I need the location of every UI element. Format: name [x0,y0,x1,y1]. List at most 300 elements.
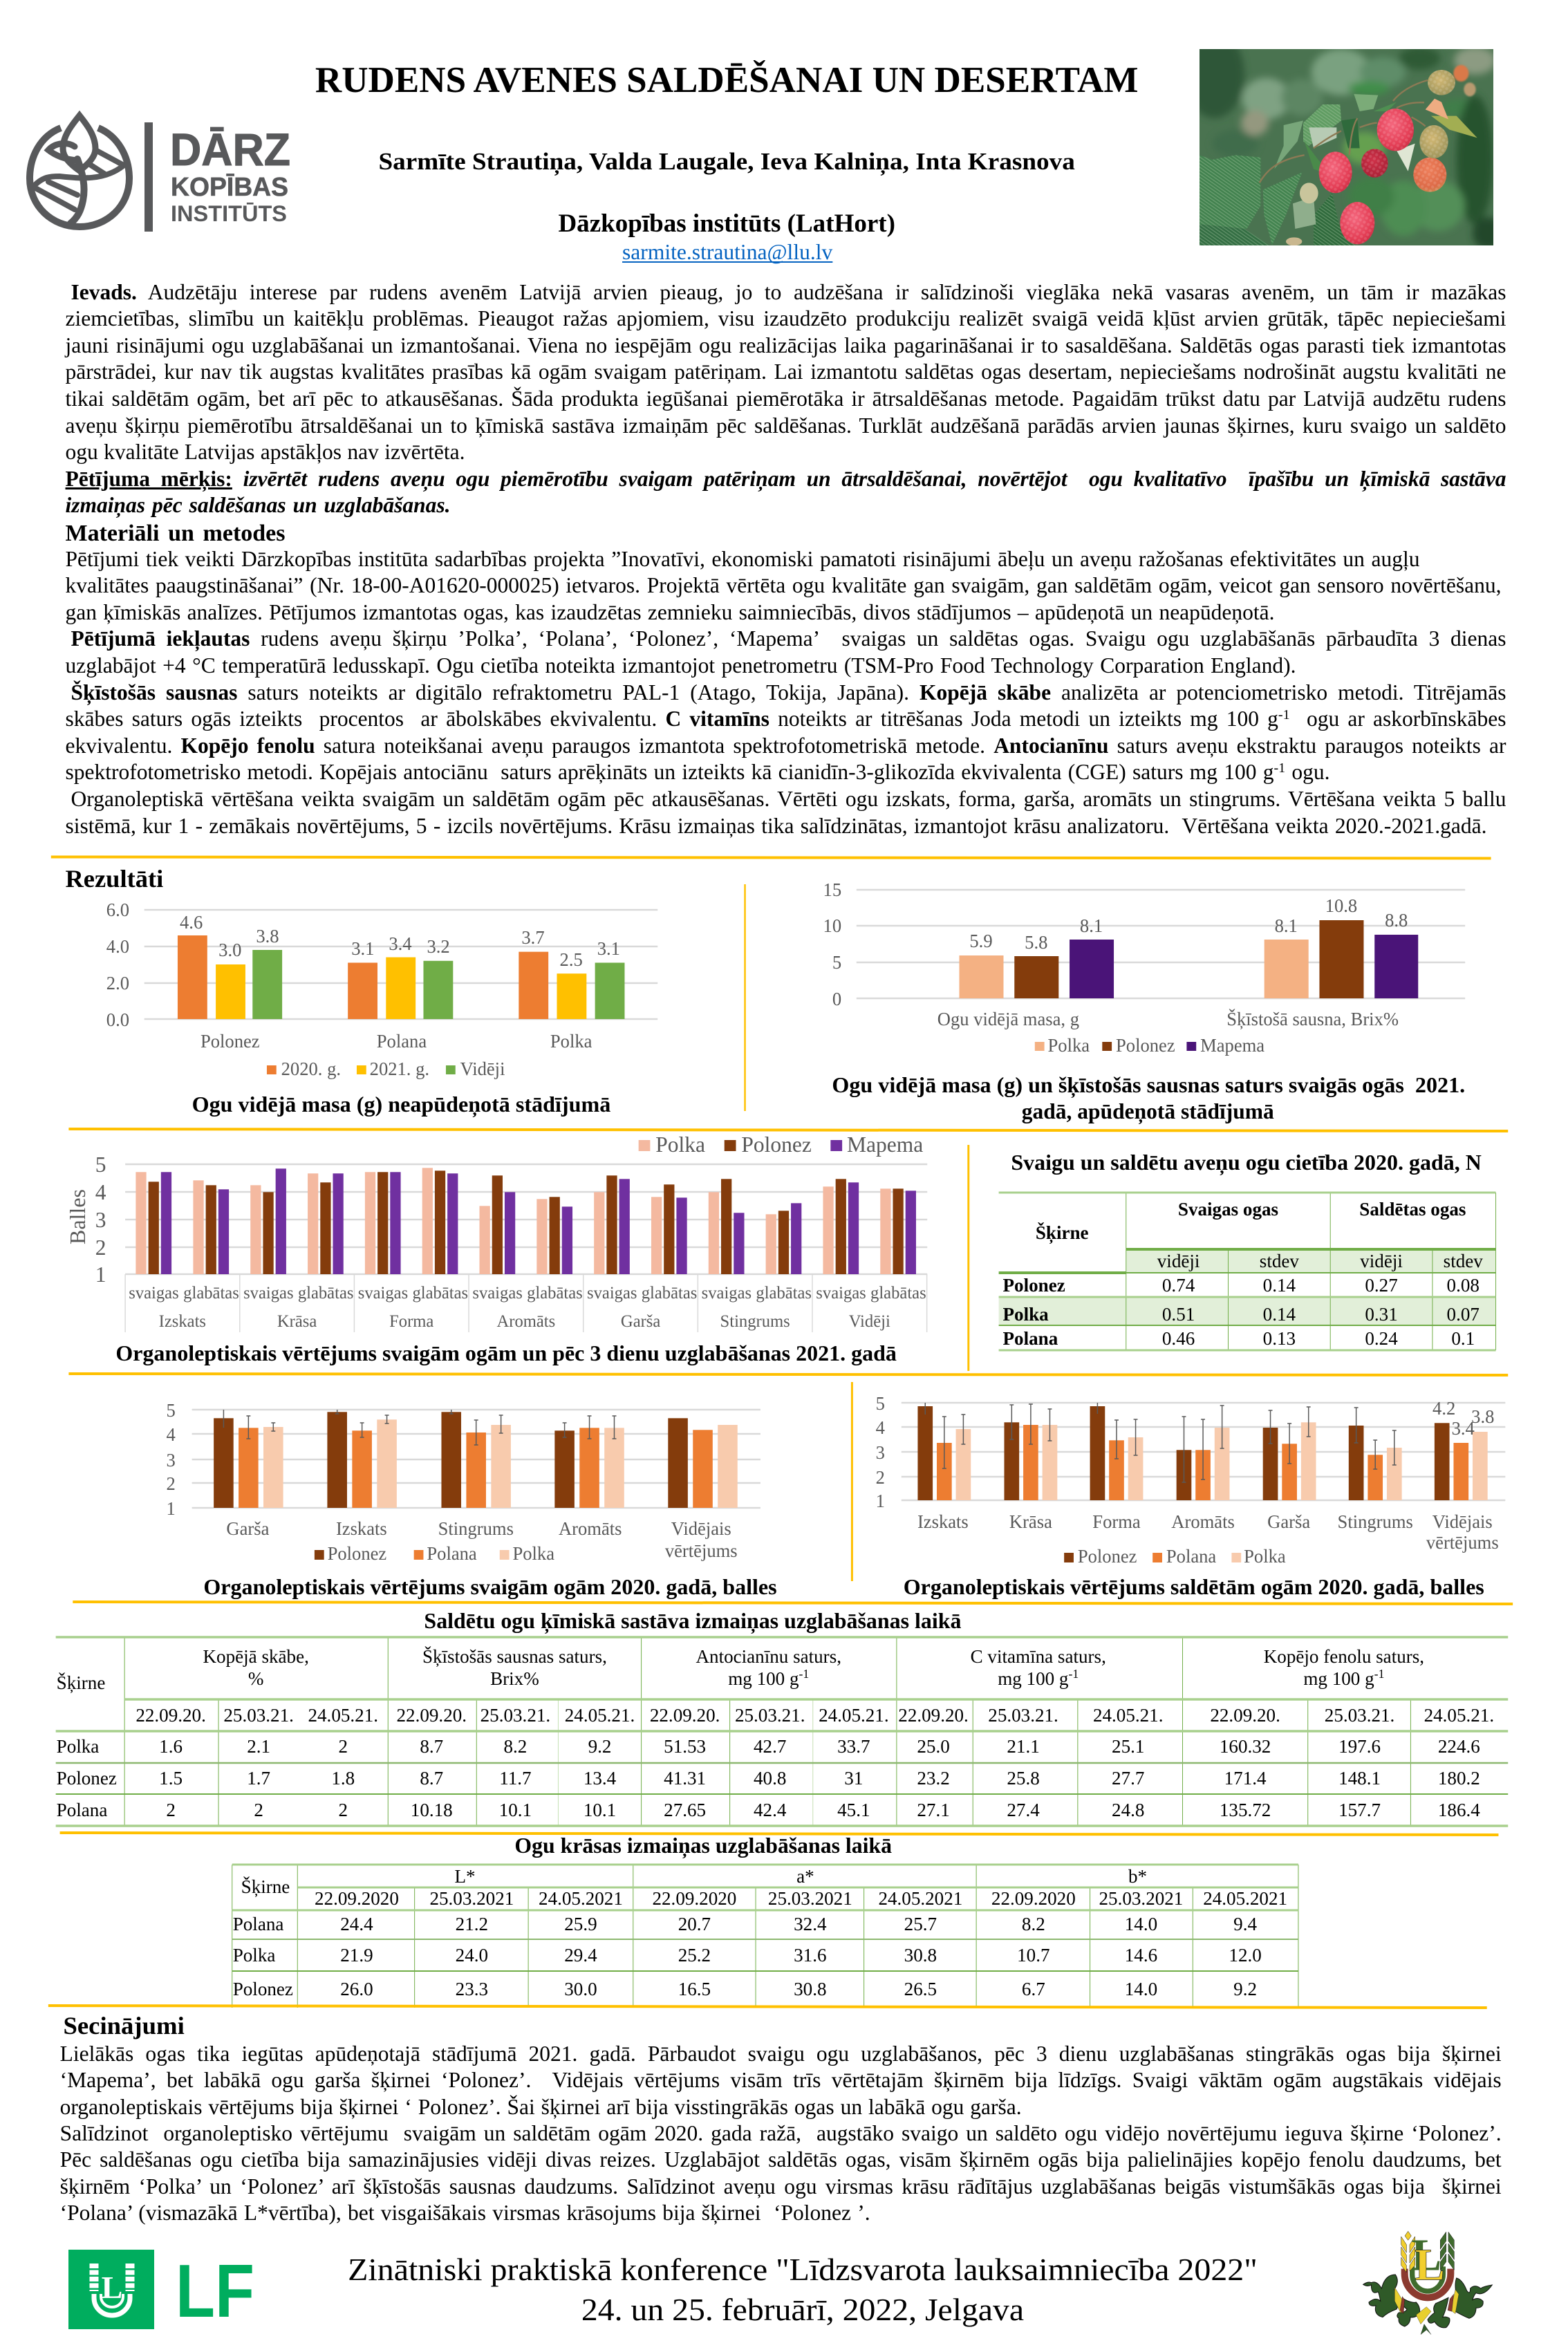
text block: introduction, aim and methods: ogu kvalitāte Latvijas apstākļos nav izvērtēta. [65,440,465,464]
text block: introduction, aim and methods: sistēmā, kur 1 - zemākais novērtējums, 5 - izcils novērtējums. Krāsu izmaiņas tika salīdzinātas, izmantojot krāsu analizatoru. Vērtēšana veikta 2020.-2021.gadā. [65,814,1486,838]
text block: introduction, aim and methods: Materiāli un metodes [65,521,285,546]
table: chemical composition during storage: 41.31 [664,1768,706,1789]
chart caption: fresh 2020: Organoleptiskais vērtējums svaigām ogām 2020. gadā, balles [203,1575,777,1599]
table: colour changes during storage: 30.0 [564,1979,597,1999]
bar chart: sensory evaluation fresh and after storage 2021: 5 [95,1152,106,1177]
table: colour changes during storage: 14.0 [1125,1914,1157,1934]
table: berry firmness: 0.27 [1365,1275,1398,1296]
table: berry firmness: 0.07 [1447,1304,1480,1325]
table: chemical composition during storage: 27.65 [664,1800,706,1820]
table: chemical composition during storage: 42.7 [754,1736,786,1757]
table: chemical composition during storage: -1 [799,1667,809,1681]
bar chart: sensory evaluation fresh and after storage 2021: glabātas [527,1284,583,1303]
bar chart: sensory frozen 2020: Aromāts [1171,1511,1235,1532]
bar chart: sensory fresh 2020 [166,1400,760,1564]
bar chart: sensory frozen 2020: Polana [1166,1546,1216,1567]
table: chemical composition during storage: 186.4 [1438,1800,1480,1820]
table: berry firmness: 0.13 [1263,1328,1296,1349]
table: berry firmness: 0.24 [1365,1328,1398,1349]
bar chart: berry mass, non-irrigated: 4.6 [180,912,203,933]
bar chart: berry mass and soluble solids, irrigated: Mapema [1200,1035,1264,1056]
bar chart: sensory evaluation fresh and after storage 2021: svaigas [587,1284,637,1303]
table: chemical composition during storage: 25.03.21. [988,1705,1058,1726]
logo: LLU crest: L [1415,2240,1445,2290]
table: chemical composition during storage: 22.09.20. [1210,1705,1280,1726]
bar chart: sensory evaluation fresh and after storage 2021: Krāsa [277,1312,317,1331]
table: chemical composition during storage: Brix% [490,1668,539,1689]
table: chemical composition during storage: 45.1 [837,1800,870,1820]
chart caption: irrigated [832,1073,1465,1125]
table: colour changes during storage: a* [796,1866,814,1887]
table: berry firmness: Polana [1003,1328,1058,1349]
bar chart: sensory frozen 2020: Polka [1244,1546,1286,1567]
table: berry firmness: Svaigas ogas [1178,1199,1278,1220]
bar chart: berry mass and soluble solids, irrigated: Polonez [1116,1035,1175,1056]
table: berry firmness: vidēji [1157,1251,1200,1271]
bar chart: berry mass and soluble solids, irrigated: 5 [832,952,841,973]
table: chemical composition during storage: 11.7 [499,1768,532,1789]
bar chart: sensory evaluation fresh and after storage 2021: Aromāts [496,1312,555,1331]
bar chart: berry mass, non-irrigated: 2.5 [560,949,583,970]
oak wreath [1363,2275,1492,2328]
table: chemical composition during storage: 1.5 [159,1768,183,1789]
bar chart: sensory evaluation fresh and after storage 2021: Garša [621,1312,660,1331]
bar chart: sensory frozen 2020: 4 [876,1417,885,1438]
bar chart: berry mass and soluble solids, irrigated: 0 [832,989,841,1009]
gold divider below first chart row [68,1128,1508,1132]
gold divider below methods [51,856,1491,860]
bar chart: berry mass, non-irrigated: 3.1 [597,938,620,959]
bar chart: sensory fresh 2020: Garša [226,1518,269,1539]
table: colour changes during storage: 9.2 [1233,1979,1257,1999]
bar chart: sensory fresh 2020: Polana [427,1543,477,1564]
table: colour changes during storage: 30.8 [904,1945,937,1966]
table: chemical composition during storage: 23.2 [917,1768,950,1789]
logo: Dārzkopības institūts: KOPĪBAS [171,173,288,202]
table: chemical composition during storage: 24.05.21. [819,1705,889,1726]
table: chemical composition during storage: 27.1 [917,1800,950,1820]
text block: introduction, aim and methods: spektrofotometrisko metodi. Kopējais antociānu saturs aprēķināts un izteikts kā cianidīn-3-glikozīda ekvivalenta (CGE) saturs mg 100 g-1 ogu. [65,760,1330,784]
table: chemical composition during storage: 22.09.20. [650,1705,720,1726]
photo: ripening raspberries on the cane [1200,49,1493,245]
bar chart: sensory frozen 2020: Polonez [1078,1546,1137,1567]
bar chart: sensory frozen 2020: Krāsa [1009,1511,1052,1532]
conference footer: 24. un 25. februārī, 2022, Jelgava [581,2292,1024,2327]
table: colour changes during storage [232,1865,1298,2008]
table: colour changes during storage: 31.6 [794,1945,827,1966]
bar chart: berry mass and soluble solids, irrigated: 8.8 [1385,910,1408,931]
table: berry firmness: 0.14 [1263,1304,1296,1325]
bar chart: berry mass, non-irrigated: 3.4 [389,933,412,954]
table: chemical composition during storage: 25.03.21. [223,1705,294,1726]
logo: LF green square [68,2249,254,2333]
conference footer [348,2252,1258,2327]
text block: introduction, aim and methods [65,280,1506,838]
table: colour changes during storage: 10.7 [1017,1945,1050,1966]
table: colour changes during storage: 26.0 [340,1979,373,1999]
text block: introduction, aim and methods: Pētījumā iekļautas rudens aveņu šķirņu ’Polka’, ‘Polana’, ‘Polonez’, ‘Mapema’ svaigas un saldētas ogas. Svaigu ogu uzglabāšanās pārbaudīta 3 dienas [71,626,1506,651]
table: colour changes during storage: 14.0 [1125,1979,1157,1999]
table: colour changes during storage: 21.9 [340,1945,373,1966]
text block: introduction, aim and methods: Pētījuma mērķis: izvērtēt rudens aveņu ogu piemērotību svaigam patēriņam un ātrsaldēšanai, novērtējot ogu kvalitatīvo īpašību un ķīmiskā sastāva [65,467,1506,491]
table: berry firmness: stdev [1260,1251,1299,1271]
table: colour changes during storage: 29.4 [564,1945,597,1966]
bar chart: sensory evaluation fresh and after storage 2021: svaigas [816,1284,866,1303]
table: chemical composition during storage: 27.4 [1007,1800,1040,1820]
table: chemical composition during storage: Polka [57,1736,99,1757]
bar chart: sensory fresh 2020: 4 [166,1424,176,1445]
bar chart: sensory fresh 2020: Polka [512,1543,554,1564]
bar chart: sensory fresh 2020: Izskats [336,1518,387,1539]
table: berry firmness: vidēji [1360,1251,1403,1271]
table: chemical composition during storage: 31 [844,1768,863,1789]
heading: Rezultāti: Rezultāti [65,865,163,893]
bar chart: berry mass and soluble solids, irrigated [823,879,1465,1056]
text block: introduction, aim and methods: gan ķīmiskās analīzes. Pētījumos izmantotas ogas, kas izaudzētas zemnieku saimniecībās, divos stādījumos – apūdeņotā un neapūdeņotā. [65,600,1275,624]
bar chart: berry mass, non-irrigated: 2.0 [106,973,129,993]
arcs [1405,2269,1450,2297]
table: colour changes during storage: 25.03.2021 [768,1888,852,1909]
table: chemical composition during storage [56,1637,1508,1826]
table: berry firmness: Šķirne [1036,1222,1089,1244]
text block: conclusions: organoleptiskais vērtējums bija šķirnei ‘ Polonez’. Šai šķirnei arī bija visstingrākās ogas un labākā ogu garša. [60,2095,1022,2119]
bar chart: berry mass and soluble solids, irrigated: 8.1 [1275,915,1298,936]
bar chart: berry mass, non-irrigated: 3.1 [351,938,374,959]
bar chart: berry mass, non-irrigated: Polka [550,1031,592,1052]
bar chart: berry mass and soluble solids, irrigated: Polka [1048,1035,1090,1056]
bar chart: berry mass and soluble solids, irrigated: 10 [823,915,841,936]
table: chemical composition during storage: 24.05.21. [1424,1705,1494,1726]
table: colour changes during storage: 24.0 [456,1945,488,1966]
bar chart: sensory frozen 2020: Forma [1092,1511,1141,1532]
table: chemical composition during storage: -1 [1068,1667,1079,1681]
logo: Dārzkopības institūts [30,115,290,232]
text block: conclusions: Pēc saldēšanas ogu cietība bija samazinājusies vidēji divas reizes. Uzglabājot saldētās ogas, visām šķirnēm ogās bija palielinājies kopējo fenolu daudzums, bet [60,2147,1502,2172]
table: chemical composition during storage: 22.09.20. [136,1705,206,1726]
bar chart: sensory frozen 2020: Garša [1267,1511,1310,1532]
table: colour changes during storage: Polana [233,1914,283,1934]
bar chart: sensory frozen 2020: 1 [876,1491,885,1511]
table: chemical composition during storage: 1.8 [331,1768,355,1789]
bar chart: berry mass and soluble solids, irrigated: 5.9 [969,931,993,951]
bar chart: sensory fresh 2020: 2 [166,1473,176,1494]
conference footer: Zinātniski praktiskā konference "Līdzsvarota lauksaimniecība 2022" [348,2252,1258,2287]
table: chemical composition during storage: 24.05.21. [1093,1705,1163,1726]
table: berry firmness: Saldētas ogas [1359,1199,1466,1220]
bar chart: sensory evaluation fresh and after storage 2021: Izskats [159,1312,206,1331]
table: chemical composition during storage: 2 [338,1800,348,1820]
table: chemical composition during storage: 22.09.20. [898,1705,969,1726]
bar chart: berry mass and soluble solids, irrigated: 10.8 [1325,895,1357,916]
chart caption: frozen 2020: Organoleptiskais vērtējums saldētām ogām 2020. gadā, balles [904,1575,1484,1599]
text block: introduction, aim and methods: aveņu šķirņu piemērotību ātrsaldēšanai un to ķīmiskā sastāva izmaiņām pēc saldēšanas. Turklāt audzēšanā parādās arvien jaunas šķirnes, kuru svaigo un saldēto [65,413,1506,438]
table heading: colour: Ogu krāsas izmaiņas uzglabāšanas laikā [514,1833,892,1859]
table: colour changes during storage: 24.4 [340,1914,373,1934]
table: chemical composition during storage: 157.7 [1338,1800,1381,1820]
bar chart: sensory evaluation fresh and after storage 2021: svaigas [358,1284,408,1303]
institute: Dāzkopības institūts (LatHort) [558,209,895,237]
table: chemical composition during storage: 25.03.21. [480,1705,550,1726]
gold divider below chemistry table [60,1831,1498,1836]
logo: LF green square: LF [176,2249,254,2333]
text block: conclusions [60,2042,1502,2225]
bar chart: sensory evaluation fresh and after storage 2021: Forma [389,1312,433,1331]
ribbon [1394,2287,1459,2335]
table: colour changes during storage: 12.0 [1229,1945,1262,1966]
bar chart: berry mass and soluble solids, irrigated: 8.1 [1080,915,1103,936]
icon: white LLU emblem: L [102,2270,122,2305]
icon: white LLU emblem [94,2264,130,2315]
gold divider below second chart row [68,1372,1508,1376]
table: colour changes during storage: 25.2 [678,1945,711,1966]
table: chemical composition during storage: 21.1 [1007,1736,1040,1757]
table heading: chemical composition: Saldētu ogu ķīmiskā sastāva izmaiņas uzglabāšanas laikā [424,1609,962,1634]
bar chart: berry mass, non-irrigated: 4.0 [106,936,129,957]
bar chart: sensory fresh 2020: vērtējums [665,1540,738,1561]
table: chemical composition during storage: 2 [338,1736,348,1757]
bar chart: berry mass and soluble solids, irrigated: Ogu vidējā masa, g [937,1009,1079,1029]
text block: conclusions: ‘Polana’ (vismazākā L*vērtība), bet visgaišākais virsmas krāsojums bija šķirnei ‘Polonez ’. [60,2201,870,2225]
table: chemical composition during storage: Polonez [57,1768,117,1789]
bar chart: sensory frozen 2020: 2 [876,1467,885,1488]
table: colour changes during storage: 21.2 [456,1914,488,1934]
table: berry firmness: stdev [1444,1251,1483,1271]
heading: Secinājumi: Secinājumi [64,2012,185,2040]
bar chart: sensory evaluation fresh and after storage 2021: svaigas [243,1284,294,1303]
bar chart: sensory evaluation fresh and after storage 2021: svaigas [472,1284,523,1303]
table: chemical composition during storage: mg 100 g [728,1668,799,1689]
bar chart: sensory frozen 2020: 5 [876,1393,885,1414]
table: colour changes during storage: 23.3 [456,1979,488,1999]
bar chart: sensory fresh 2020: Polonez [328,1543,386,1564]
bar chart: sensory frozen 2020: 3 [876,1442,885,1463]
table: chemical composition during storage: 148.1 [1338,1768,1381,1789]
bar chart: sensory evaluation fresh and after storage 2021: Stingrums [720,1312,790,1331]
bar chart: sensory evaluation fresh and after storage 2021: 2 [95,1235,106,1260]
text block: introduction, aim and methods: kvalitātes paaugstināšanai” (Nr. 18-00-A01620-000025) ietvaros. Projektā vērtēta ogu kvalitāte gan svaigām, gan saldētām ogām, veicot gan sensoro novērtēšanu, [65,573,1502,597]
table: colour changes during storage: Polka [233,1945,275,1966]
table: chemical composition during storage: 25.1 [1112,1736,1144,1757]
table: chemical composition during storage: 135.72 [1220,1800,1271,1820]
table: colour changes during storage: 25.03.2021 [1099,1888,1183,1909]
text block: introduction, aim and methods: uzglabājot +4 °C temperatūrā ledusskapī. Ogu cietība noteikta izmantojot penetrometru (TSM-Pro Food Technology Corparation England). [65,653,1296,678]
table heading: firmness: Svaigu un saldētu aveņu ogu cietība 2020. gadā, N [1011,1150,1482,1176]
bar chart: berry mass, non-irrigated: 0.0 [106,1009,129,1030]
bar chart: sensory frozen 2020: 3.4 [1452,1418,1475,1439]
table: chemical composition during storage: 25.03.21. [1325,1705,1394,1726]
bar chart: sensory evaluation fresh and after storage 2021: Mapema [847,1132,923,1157]
bar chart: sensory fresh 2020: Vidējais [671,1518,731,1539]
table: chemical composition during storage: 160.32 [1220,1736,1271,1757]
table: colour changes during storage: Šķirne [241,1876,290,1897]
table: chemical composition during storage: 10.18 [411,1800,453,1820]
table: berry firmness: Polonez [1003,1275,1065,1296]
table: chemical composition during storage: 2.1 [247,1736,270,1757]
table: colour changes during storage: 25.7 [904,1914,937,1934]
table: berry firmness: 0.74 [1162,1275,1195,1296]
text block: introduction, aim and methods: ekvivalentu. Kopējo fenolu satura noteikšanai aveņu paraugos izmantota spektrofotometriskā metode. Antocianīnu saturs aveņu ekstraktu paraugos noteikts ar [65,734,1506,758]
text block: introduction, aim and methods: tikai saldētām ogām, bet arī pēc to atkausēšanas. Šāda produkta iegūšanai piemērotāka ir ātrsaldēšanas metode. Pagaidām trūkst datu par Latvijā audzētu rudens [65,386,1506,411]
table: colour changes during storage: 6.7 [1022,1979,1045,1999]
bar chart: sensory evaluation fresh and after storage 2021: svaigas [702,1284,752,1303]
chart caption: irrigated: gadā, apūdeņotā stādījumā [1022,1099,1274,1125]
table: chemical composition during storage: 42.4 [754,1800,787,1820]
table: colour changes during storage: 32.4 [794,1914,827,1934]
table: chemical composition during storage: 24.05.21. [308,1705,378,1726]
table: colour changes during storage: 8.2 [1022,1914,1045,1934]
text block: introduction, aim and methods: izmaiņas pēc saldēšanas un uzglabāšanas. [65,493,451,517]
bar chart: sensory frozen 2020: Izskats [917,1511,969,1532]
text block: introduction, aim and methods: pārstrādei, kur nav tik augstas kvalitātes prasības kā ogām svaigam patēriņam. Lai izmantotu saldētas ogas desertam, nepieciešams nodrošināt augstu kvalitāti ne [65,360,1506,384]
table: chemical composition during storage: Šķīstošās sausnas saturs, [422,1646,607,1667]
bar chart: berry mass, non-irrigated: Polana [377,1031,427,1052]
table: chemical composition during storage: 40.8 [754,1768,786,1789]
logo: Dārzkopības institūts: DĀRZ [170,124,290,175]
table: chemical composition during storage: 8.7 [420,1768,443,1789]
table: chemical composition during storage: 13.4 [584,1768,617,1789]
chart caption: sensory 2021: Organoleptiskais vērtējums svaigām ogām un pēc 3 dienu uzglabāšanas 2021. gadā [115,1341,897,1365]
bar chart: sensory fresh 2020: 3 [166,1450,176,1471]
table: colour changes during storage: 30.8 [794,1979,827,1999]
text block: introduction, aim and methods: Pētījumi tiek veikti Dārzkopības institūta sadarbības projekta ”Inovatīvi, ekonomiski pamatoti risinājumi ābeļu un aveņu ražošanas efektivitātes un augļu [65,547,1420,571]
title: RUDENS AVENES SALDĒŠANAI UN DESERTAM [315,60,1139,100]
table: chemical composition during storage: 25.0 [917,1736,950,1757]
table: chemical composition during storage: Šķirne [57,1672,105,1693]
bar chart: sensory evaluation fresh and after storage 2021: Balles [66,1189,90,1244]
table: colour changes during storage: L* [454,1866,476,1887]
logo: Dārzkopības institūts: INSTITŪTS [171,201,287,226]
table: chemical composition during storage: Polana [57,1800,107,1820]
bar chart: berry mass, non-irrigated: 2020. g. [281,1058,341,1079]
table: colour changes during storage: Polonez [233,1979,293,1999]
authors: Sarmīte Strautiņa, Valda Laugale, Ieva Kalniņa, Inta Krasnova [378,148,1075,176]
table: chemical composition during storage: -1 [1374,1667,1384,1681]
bar chart: sensory evaluation fresh and after storage 2021: glabātas [756,1284,812,1303]
table: chemical composition during storage: Antocianīnu saturs, [696,1646,841,1667]
text block: introduction, aim and methods: ziemcietības, slimību un kaitēkļu problēmas. Pieaugot ražas apjomiem, visu izaudzēto produkciju realizēt svaigā veidā kļūst arvien grūtāk, tāpēc nepieciešami [65,306,1506,330]
table: chemical composition during storage: 10.1 [584,1800,616,1820]
table: chemical composition during storage: 8.7 [420,1736,443,1757]
table: chemical composition during storage: % [248,1668,263,1689]
bar chart: sensory evaluation fresh and after storage 2021: glabātas [183,1284,239,1303]
bar chart: sensory frozen 2020: 3.8 [1471,1406,1494,1427]
bar chart: sensory evaluation fresh and after storage 2021: glabātas [412,1284,468,1303]
bar chart: sensory frozen 2020: vērtējums [1426,1532,1499,1553]
table: berry firmness: 0.51 [1162,1304,1195,1325]
bar chart: sensory frozen 2020: Stingrums [1338,1511,1413,1532]
table: chemical composition during storage: 180.2 [1438,1768,1480,1789]
table: colour changes during storage: 14.6 [1125,1945,1157,1966]
table: chemical composition during storage: 10.1 [499,1800,532,1820]
table: colour changes during storage: 26.5 [904,1979,937,1999]
table: colour changes during storage: 24.05.2021 [878,1888,962,1909]
text block: conclusions: Salīdzinot organoleptisko vērtējumu svaigām un saldētām ogām 2020. gada ražā, augstāko svaigo un saldēto ogu vidējo novērtējumu ieguva šķirne ‘Polonez’. [60,2121,1502,2145]
table: chemical composition during storage: 24.8 [1112,1800,1144,1820]
table: colour changes during storage: 22.09.2020 [653,1888,736,1909]
table: colour changes during storage: 24.05.2021 [539,1888,623,1909]
table: chemical composition during storage: 1.7 [247,1768,270,1789]
bar chart: sensory evaluation fresh and after storage 2021: glabātas [870,1284,926,1303]
bar chart: berry mass, non-irrigated: 3.8 [256,926,279,946]
bar chart: berry mass and soluble solids, irrigated: Šķīstošā sausna, Brix% [1226,1009,1399,1029]
table: berry firmness: Polka [1003,1304,1049,1325]
table: colour changes during storage: 20.7 [678,1914,711,1934]
table: colour changes during storage: 25.03.2021 [429,1888,514,1909]
bar chart: sensory evaluation fresh and after storage 2021: Polka [655,1132,705,1157]
table: chemical composition during storage: 1.6 [159,1736,183,1757]
table: berry firmness: 0.46 [1162,1328,1195,1349]
wheat [1401,2231,1454,2272]
bar chart: sensory evaluation fresh and after storage 2021: Vidēji [849,1312,890,1331]
table: colour changes during storage: 16.5 [678,1979,711,1999]
table: chemical composition during storage: 8.2 [503,1736,527,1757]
table: chemical composition during storage: 2 [166,1800,176,1820]
bar chart: sensory frozen 2020 [876,1393,1505,1567]
table: colour changes during storage: 24.05.2021 [1203,1888,1287,1909]
text block: introduction, aim and methods: skābes saturs ogās izteikts procentos ar ābolskābes ekvivalentu. C vitamīns noteikts ar titrēšanas Joda metodi un izteikts mg 100 g-1 ogu ar askorbīnskābes [65,707,1506,731]
table: colour changes during storage: b* [1128,1866,1147,1887]
table: chemical composition during storage: mg 100 g [998,1668,1068,1689]
bar chart: sensory evaluation fresh and after storage 2021: 4 [95,1180,106,1204]
text block: introduction, aim and methods: Organoleptiskā vērtēšana veikta svaigām un saldētām ogām pēc atkausēšanas. Vērtēti ogu izskats, forma, garša, aromāts un stingrums. Vērtēšana veikta 5 ballu [71,787,1506,811]
bar chart: berry mass and soluble solids, irrigated: 5.8 [1025,932,1047,953]
bar chart: sensory evaluation fresh and after storage 2021: svaigas [129,1284,179,1303]
table: chemical composition during storage: 33.7 [837,1736,870,1757]
bar chart: berry mass, non-irrigated: 3.0 [218,940,241,960]
table: chemical composition during storage: 2 [254,1800,263,1820]
table: chemical composition during storage: 27.7 [1112,1768,1144,1789]
table: chemical composition during storage: 51.53 [664,1736,706,1757]
text block: conclusions: Lielākās ogas tika iegūtas apūdeņotajā stādījumā 2021. gadā. Pārbaudot svaigu ogu uzglabāšanos, pēc 3 dienu uzglabāšanas stingrākās ogas bija šķirnei [60,2042,1502,2066]
chart caption: irrigated: Ogu vidējā masa (g) un šķīstošās sausnas saturs svaigās ogās 2021. [832,1073,1465,1099]
bar chart: sensory fresh 2020: Aromāts [559,1518,622,1539]
table: colour changes during storage: 25.9 [564,1914,597,1934]
table: chemical composition during storage: mg 100 g [1303,1668,1374,1689]
bar chart: sensory evaluation fresh and after storage 2021 [66,1132,927,1332]
bar chart: sensory frozen 2020: 4.2 [1432,1398,1455,1419]
table: chemical composition during storage: 224.6 [1438,1736,1480,1757]
table: chemical composition during storage: 25.03.21. [735,1705,805,1726]
table: berry firmness: 0.31 [1365,1304,1398,1325]
table: chemical composition during storage: 9.2 [588,1736,611,1757]
table: chemical composition during storage: 22.09.20. [397,1705,467,1726]
table: chemical composition during storage: Kopējā skābe, [203,1646,309,1667]
table: colour changes during storage: 9.4 [1233,1914,1257,1934]
table: berry firmness: 0.1 [1451,1328,1475,1349]
bar chart: berry mass, non-irrigated: 3.2 [427,936,450,957]
text block: conclusions: šķirnēm ‘Polka’ un ‘Polonez’ arī šķīstošās sausnas daudzums. Salīdzinot aveņu ogu virsmas krāsu rādītājus uzglabāšanas beigās vistumšākās ogas bija šķirnei [60,2174,1502,2199]
bar chart: sensory evaluation fresh and after storage 2021: glabātas [298,1284,353,1303]
bar chart: sensory evaluation fresh and after storage 2021: 1 [95,1262,106,1287]
bar chart: berry mass, non-irrigated: 3.7 [521,927,545,948]
email link: sarmite.strautina@llu.lv [622,240,832,264]
text block: conclusions: ‘Mapema’, bet labākā ogu garša šķirnei ‘Polonez’. Vidējais vērtējums visām trīs vērtētajām šķirnēm bija līdzīgs. Svaigi vāktām ogām augstākais vidējais [60,2068,1502,2092]
bar chart: sensory fresh 2020: Stingrums [438,1518,514,1539]
chart caption: non-irrigated mass: Ogu vidējā masa (g) neapūdeņotā stādījumā [192,1092,610,1118]
table: berry firmness: 0.08 [1447,1275,1480,1296]
gold divider below third chart row [73,1600,1513,1605]
bar chart: berry mass, non-irrigated: Polonez [200,1031,260,1052]
logo: LLU crest: L [1412,2230,1441,2280]
table: colour changes during storage: 22.09.2020 [315,1888,399,1909]
logo: LLU crest [1363,2230,1492,2335]
bar chart: sensory evaluation fresh and after storage 2021: glabātas [642,1284,697,1303]
table: colour changes during storage: 22.09.2020 [991,1888,1076,1909]
bar chart: sensory fresh 2020: 5 [166,1400,176,1421]
bar chart: sensory evaluation fresh and after storage 2021: 3 [95,1208,106,1232]
table: berry firmness [999,1193,1496,1350]
bar chart: sensory frozen 2020: Vidējais [1432,1511,1493,1532]
